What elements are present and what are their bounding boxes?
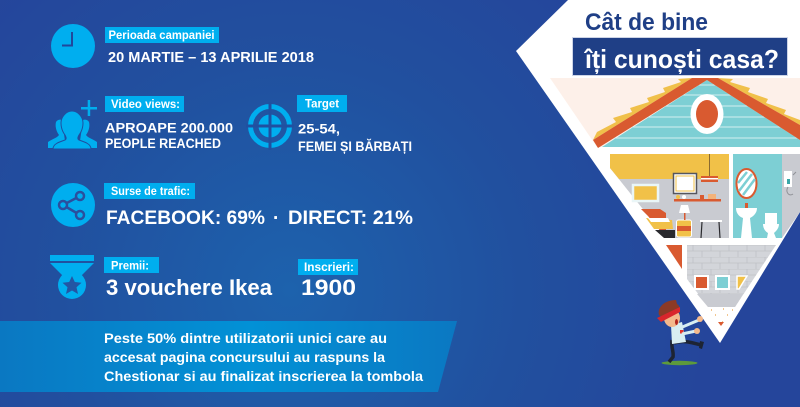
registrations label: Inscrieri: (304, 262, 354, 274)
target value: FEMEI ȘI BĂRBAȚI (298, 139, 412, 154)
traffic sources values: · (273, 208, 279, 229)
video views label: Video views: (111, 99, 180, 111)
callout banner: Chestionar si au finalizat inscrierea la tombola (104, 369, 424, 384)
share icon (51, 183, 95, 227)
video views label (105, 96, 184, 112)
period label: Perioada campaniei (108, 30, 214, 42)
title line two: îți cunoști casa? (583, 44, 779, 74)
registrations value: 1900 (301, 275, 356, 300)
ground shadow (662, 361, 698, 365)
target label: Target (305, 98, 339, 110)
prizes value: 3 vouchere Ikea (106, 275, 272, 300)
house panel (516, 0, 800, 343)
traffic sources values: DIRECT: 21% (288, 208, 413, 229)
target icon (246, 102, 294, 150)
traffic sources label (104, 183, 195, 199)
bathroom (733, 154, 800, 238)
traffic sources label: Surse de trafic: (111, 186, 190, 198)
callout banner: accesat pagina concursului au raspuns la (104, 350, 386, 365)
callout banner: Peste 50% dintre utilizatorii unici care au (104, 331, 387, 346)
target label (297, 95, 347, 112)
basement (666, 245, 776, 326)
callout banner (0, 321, 457, 392)
target value (298, 122, 412, 154)
prizes label: Premii: (111, 260, 149, 272)
medal icon (50, 255, 94, 299)
video views value: PEOPLE REACHED (105, 136, 221, 151)
people reached icon (48, 100, 97, 149)
video views value (105, 120, 233, 151)
title line one: Cât de bine (585, 9, 708, 36)
blindfolded man illustration (657, 300, 704, 365)
registrations label (298, 259, 358, 275)
traffic sources values: FACEBOOK: 69% (106, 208, 265, 229)
campaign dates: 20 MARTIE – 13 APRILIE 2018 (108, 49, 314, 66)
traffic sources values (106, 208, 413, 229)
video views value: APROAPE 200.000 (105, 120, 233, 136)
prizes label (104, 257, 159, 273)
clock icon (51, 24, 95, 68)
target value: 25-54, (298, 122, 340, 136)
bedroom (610, 154, 729, 238)
attic (550, 78, 800, 148)
